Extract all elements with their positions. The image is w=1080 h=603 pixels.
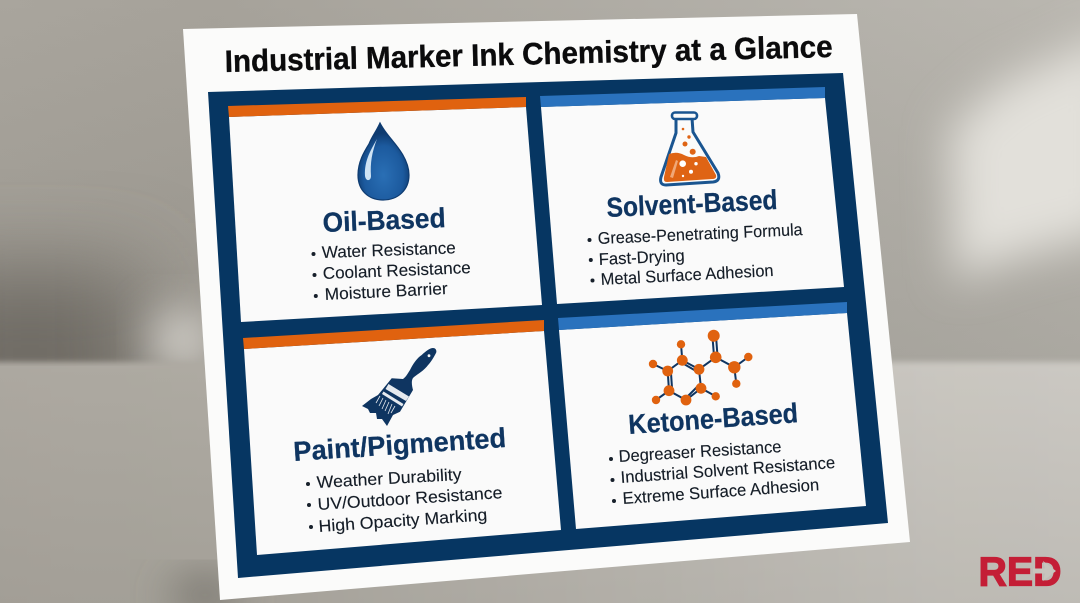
heading: Solvent-Based: Solvent-Based — [606, 184, 778, 223]
panel: ketone-based — [558, 302, 866, 529]
orange accent bar — [243, 320, 544, 349]
bullet list: Industrial Solvent Resistance — [620, 453, 836, 487]
navy frame — [208, 73, 888, 578]
bullet list: Degreaser Resistance — [618, 437, 782, 466]
bullet list — [306, 465, 503, 536]
icon: flask — [661, 112, 719, 185]
bullet list: Coolant Resistance — [322, 258, 471, 283]
bullet list: Fast-Drying — [598, 246, 685, 269]
heading: Oil-Based: Oil-Based — [322, 202, 446, 238]
bullet list: Extreme Surface Adhesion — [622, 475, 820, 508]
bullet list: Metal Surface Adhesion — [600, 261, 774, 289]
panel background — [229, 107, 542, 322]
panel background — [559, 313, 866, 529]
bullet list: Moisture Barrier — [324, 279, 448, 304]
orange accent bar — [228, 97, 526, 117]
white card — [183, 14, 910, 600]
panel: paint/pigmented — [243, 320, 561, 555]
bullet list: Weather Durability — [316, 465, 463, 492]
bullet list: Water Resistance — [321, 238, 456, 262]
heading: Ketone-Based: Ketone-Based — [627, 397, 799, 440]
bullet list — [588, 220, 804, 289]
panel: oil-based — [228, 97, 542, 322]
logo: RED: RED — [978, 548, 1062, 594]
bullet list — [609, 437, 836, 508]
icon: paint brush — [362, 348, 436, 426]
title: Industrial Marker Ink Chemistry at a Glance — [224, 29, 833, 79]
panel background — [541, 98, 844, 304]
blue accent bar — [540, 87, 825, 107]
bullet list: Grease-Penetrating Formula — [597, 220, 804, 248]
bullet list: High Opacity Marking — [318, 505, 488, 536]
panel background — [244, 331, 561, 555]
panel: solvent-based — [540, 87, 844, 304]
blue accent bar — [558, 302, 847, 330]
heading: Paint/Pigmented: Paint/Pigmented — [292, 422, 507, 467]
bullet list: UV/Outdoor Resistance — [317, 483, 503, 514]
icon: molecule — [649, 330, 752, 405]
icon: oil drop — [358, 123, 409, 200]
bullet list — [312, 238, 471, 304]
